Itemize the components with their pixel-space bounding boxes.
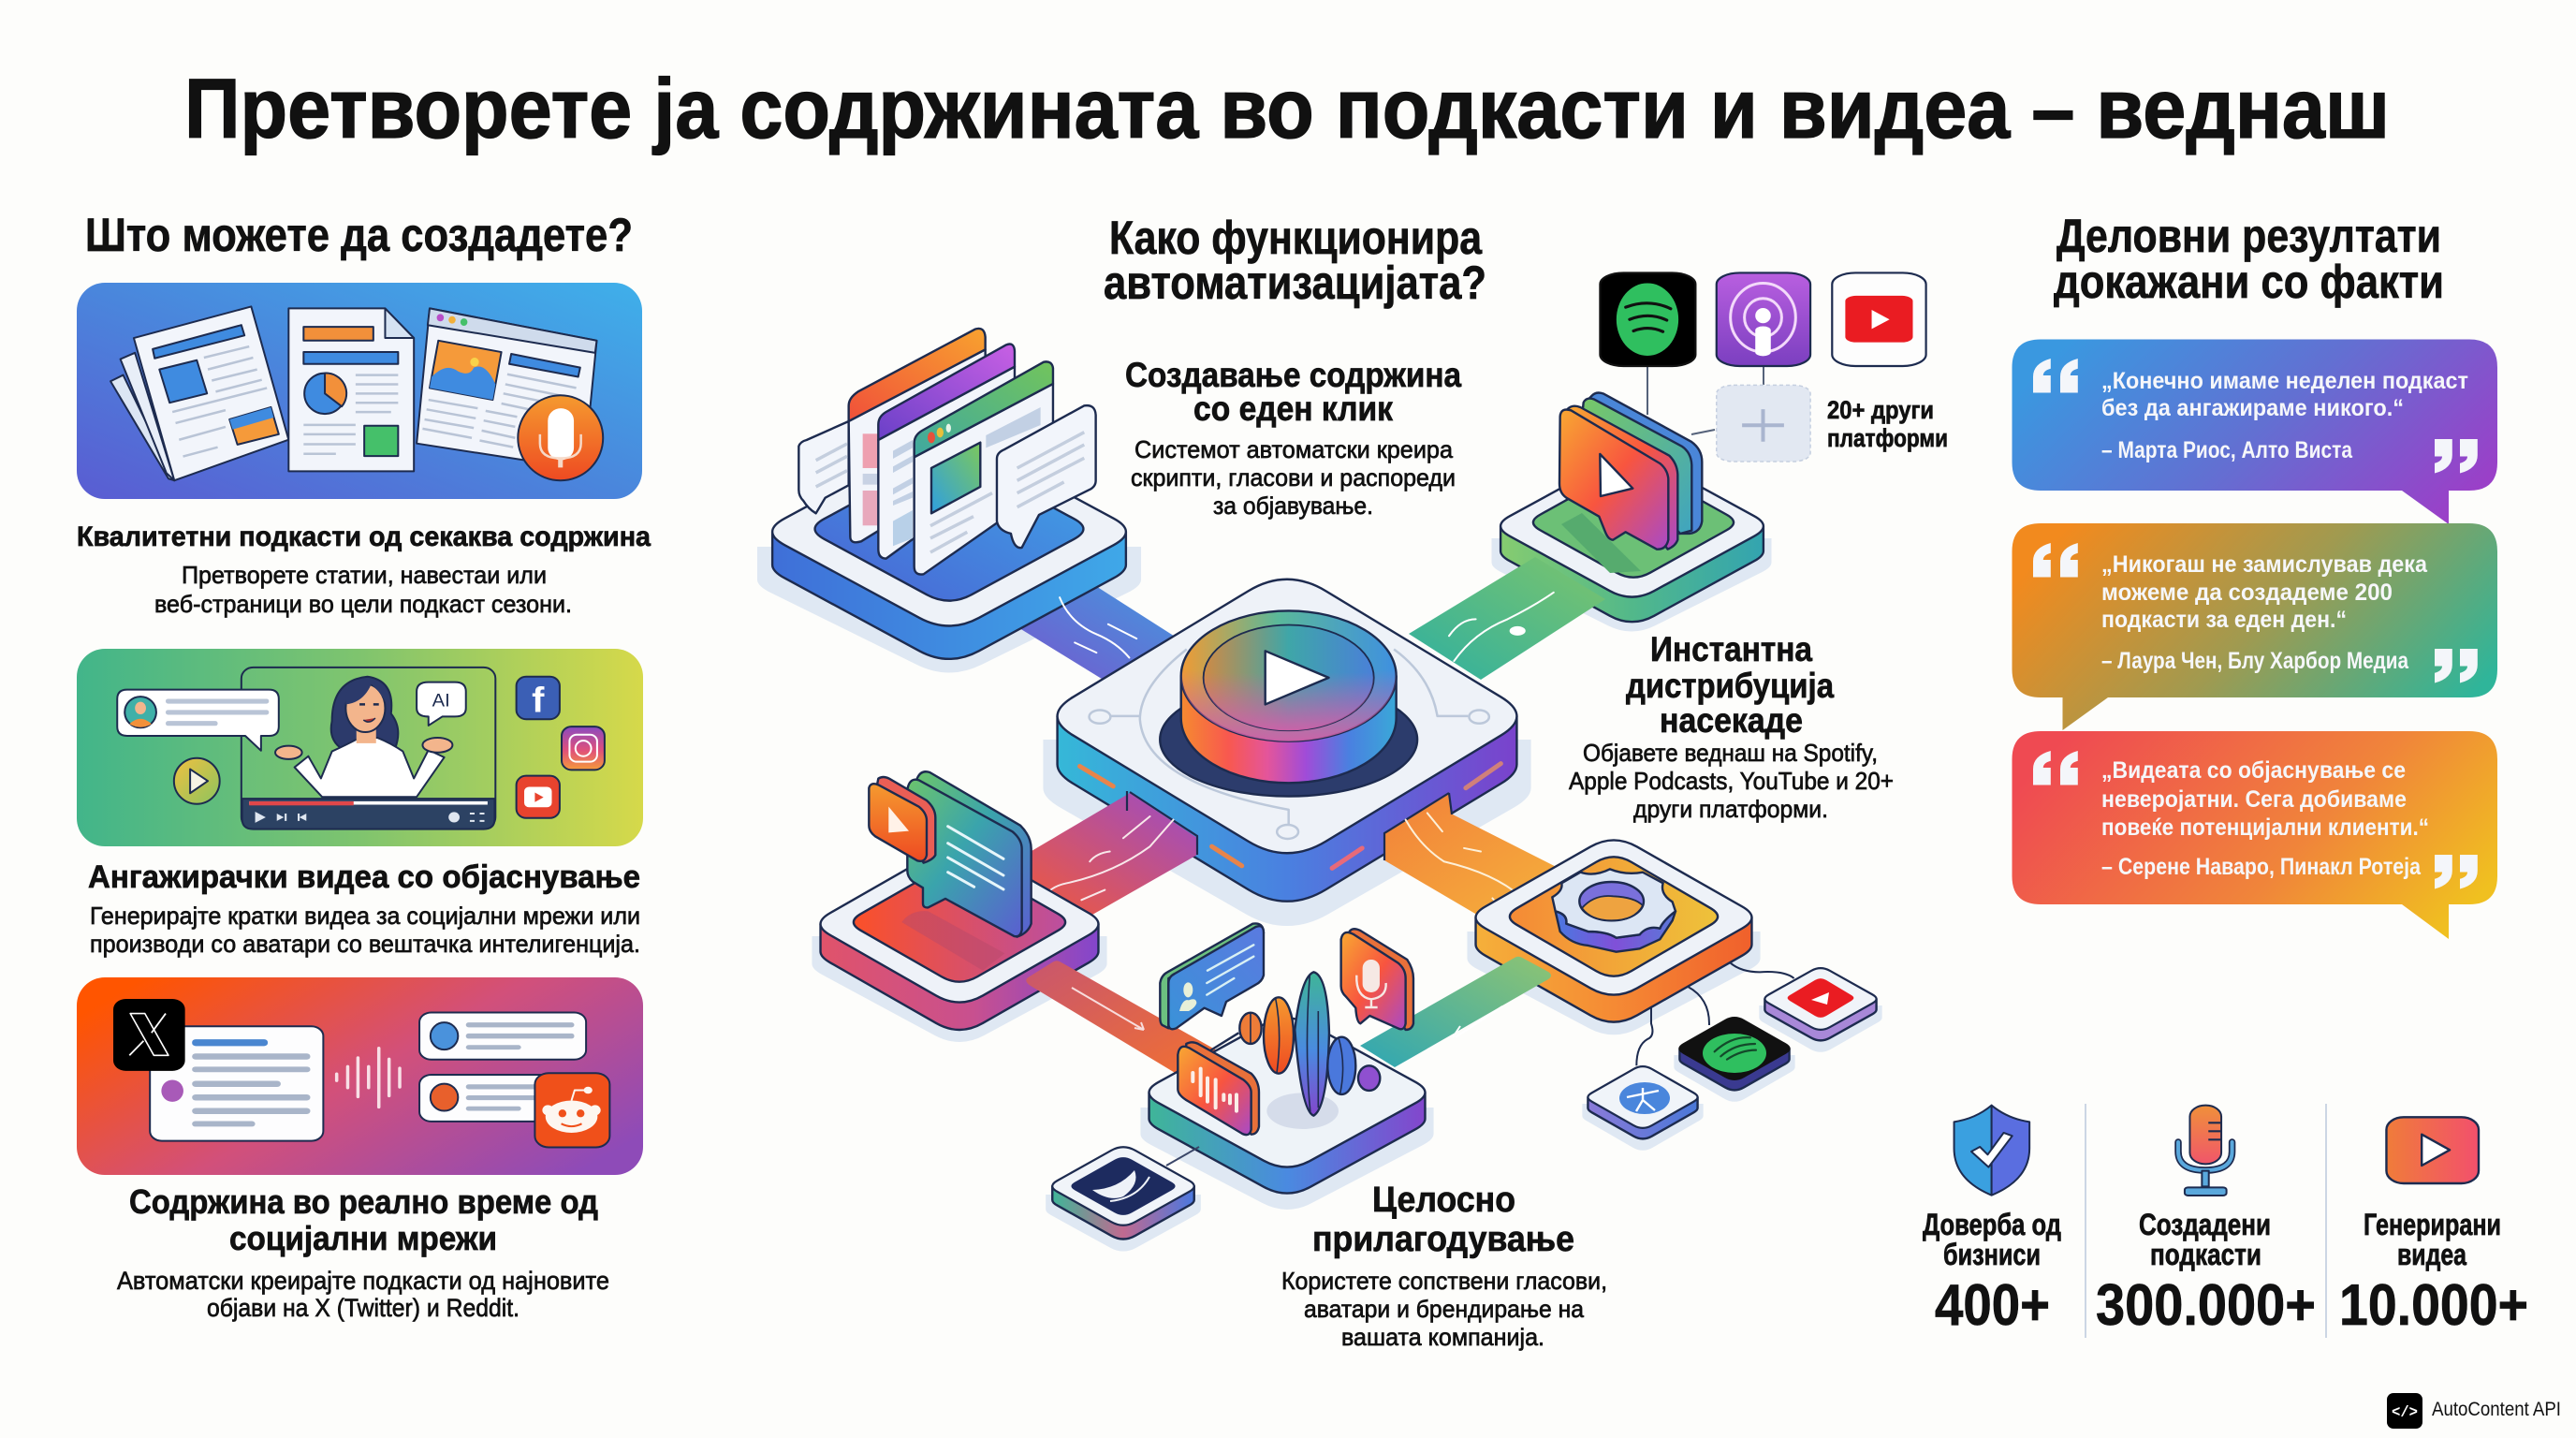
icon: more platforms: [1717, 385, 1810, 462]
text block: quality podcasts: веб-страници во цели подкаст сезони.: [154, 590, 572, 618]
text block: one-click content creation: Системот автоматски креира: [1134, 435, 1454, 463]
text block: quality podcasts: Квалитетни подкасти од секаква содржина: [77, 521, 651, 552]
panel: podcast card illustration: [77, 283, 642, 499]
callout: testimonial one: „Конечно имаме неделен подкаст: [2101, 368, 2468, 394]
heading: how automation works: автоматизацијата?: [1104, 257, 1486, 309]
text block: instant distribution: други платформи.: [1633, 795, 1828, 823]
title: Претворете ја содржината во подкасти и видеа – веднаш: [184, 63, 2390, 156]
icon: video and script bubbles: [869, 771, 1032, 971]
icon: brand feather tile on small platform: [1052, 1147, 1194, 1225]
text block: social content: социјални мрежи: [229, 1219, 497, 1257]
text block: social content: [117, 1182, 609, 1322]
callout: testimonial two: можеме да создадеме 200: [2101, 580, 2393, 606]
brand badge: AutoContent API: [2432, 1399, 2561, 1420]
text block: instant distribution: [1569, 630, 1894, 823]
heading: business results: Деловни резултати: [2056, 210, 2441, 262]
divider and stat: created podcasts: [2096, 1104, 2327, 1338]
stat: generated videos: видеа: [2397, 1238, 2466, 1271]
heading: how automation works: Како функционира: [1109, 212, 1483, 264]
text block: full customization: аватари и брендирање на: [1304, 1295, 1585, 1323]
icon: blue person tile on small platform: [1588, 1066, 1698, 1128]
divider and stat: created podcasts: подкасти: [2150, 1238, 2261, 1271]
connector lines: small tiles: [1134, 962, 1794, 1166]
heading: business results: [2054, 210, 2444, 308]
connector lines to platform icons: [1647, 365, 1764, 434]
divider and stat: trusted by businesses: 400+: [1935, 1273, 2050, 1338]
text block: instant distribution: Apple Podcasts, YouTube и 20+: [1569, 767, 1894, 795]
callout: testimonial three: повеќе потенцијални клиенти.“: [2101, 814, 2429, 841]
callout: testimonial three: [2012, 731, 2497, 939]
icon: video player with presenter and social icons: AI: [432, 691, 450, 711]
icon: audio waves and bubbles: [1160, 923, 1413, 1135]
brand badge: [2387, 1393, 2561, 1429]
text block: social content: Автоматски креирајте подкасти од најновите: [117, 1267, 609, 1295]
text block: one-click content creation: со еден клик: [1193, 389, 1393, 428]
text block: social content: објави на X (Twitter) и Reddit.: [207, 1294, 520, 1322]
callout: testimonial two: – Лаура Чен, Блу Харбор Медиа: [2101, 648, 2409, 674]
text block: social content: Содржина во реално време од: [129, 1182, 598, 1221]
platform bases: [772, 526, 1877, 1239]
platform drop shadows: [757, 538, 1882, 1252]
text block: one-click content creation: [1125, 356, 1461, 520]
icon: stacked web pages and speech bubbles: [798, 329, 1096, 575]
icon: video play: [2386, 1117, 2479, 1183]
icon: shield with check: [1954, 1106, 2029, 1196]
text block: instant distribution: Објавете веднаш на Spotify,: [1583, 739, 1878, 767]
panel: social content card illustration: [77, 977, 643, 1175]
callout: testimonial two: „Никогаш не замислував дека: [2101, 551, 2428, 578]
divider and stat: created podcasts: 300.000+: [2096, 1273, 2316, 1338]
icon: video player with presenter and social icons: f: [532, 681, 545, 720]
stat: generated videos: Генерирани: [2364, 1208, 2501, 1241]
divider and stat: trusted by businesses: Доверба од: [1923, 1208, 2061, 1241]
text block: instant distribution: дистрибуција: [1626, 667, 1834, 705]
icon: documents and microphone: [110, 306, 603, 480]
panel: explainer video card illustration: [77, 649, 643, 846]
text block: explainer videos: производи со аватари со вештачка интелигенција.: [90, 930, 640, 958]
icon: play button: [1160, 610, 1417, 797]
text block: full customization: Целосно: [1372, 1181, 1515, 1220]
panel: content creation platform: [772, 329, 1126, 625]
brand badge: </>: [2392, 1404, 2418, 1422]
icon: video player with presenter and social icons: [117, 668, 605, 829]
callout: testimonial one: без да ангажираме никого.“: [2101, 395, 2404, 421]
heading: how automation works: [1104, 212, 1486, 309]
panel: central play hub: [1058, 580, 1516, 868]
text block: 20+ other platforms: платформи: [1827, 424, 1948, 452]
icon: Spotify tile on small platform: [1679, 1018, 1790, 1079]
text block: full customization: вашата компанија.: [1341, 1323, 1544, 1351]
divider and stat: trusted by businesses: бизниси: [1943, 1238, 2041, 1271]
icon: layered video bubbles: [1559, 392, 1702, 550]
heading: what you can create: Што можете да создадете?: [85, 209, 633, 261]
stat: generated videos: [2339, 1208, 2528, 1338]
text block: one-click content creation: скрипти, гласови и распореди: [1131, 463, 1456, 492]
icon: microphone: [2178, 1106, 2232, 1196]
callout: testimonial one: – Марта Риос, Алто Виста: [2101, 437, 2353, 463]
text block: explainer videos: Ангажирачки видеа со објаснување: [88, 859, 640, 895]
text block: quality podcasts: [77, 521, 651, 618]
text block: explainer videos: [88, 859, 640, 958]
text block: instant distribution: Инстантна: [1650, 630, 1812, 668]
icon: Spotify: [1600, 272, 1695, 366]
divider and stat: created podcasts: Создадени: [2139, 1208, 2271, 1241]
panel: customization settings platform: [1476, 840, 1751, 995]
icon: YouTube: [1832, 272, 1926, 366]
icon: Apple Podcasts: [1717, 272, 1810, 366]
divider and stat: trusted by businesses: [1923, 1104, 2086, 1338]
text block: 20+ other platforms: [1827, 396, 1948, 452]
callout: testimonial three: – Серене Наваро, Пинакл Ротеја: [2101, 854, 2422, 880]
text block: explainer videos: Генерирајте кратки видеа за социјални мрежи или: [90, 902, 640, 930]
text block: full customization: Користете сопствени гласови,: [1281, 1267, 1607, 1295]
callout: testimonial three: „Видеата со објаснување се: [2101, 757, 2406, 784]
heading: business results: докажани со факти: [2054, 256, 2444, 308]
text block: full customization: [1281, 1181, 1607, 1351]
panel: script platform: [821, 771, 1098, 1003]
text block: one-click content creation: за објавување.: [1213, 492, 1373, 520]
panel: instant distribution platform: [1500, 392, 1764, 597]
stat: generated videos: 10.000+: [2339, 1273, 2528, 1338]
text block: instant distribution: насекаде: [1660, 701, 1803, 740]
connector: hub to platforms bands: [1006, 557, 1605, 1077]
panel: customization wave platform: [1149, 923, 1425, 1167]
callout: testimonial two: подкасти за еден ден.“: [2101, 607, 2347, 633]
text block: quality podcasts: Претворете статии, навестаи или: [182, 561, 547, 589]
icon: X and Reddit posts with sound wave: [113, 999, 609, 1147]
text block: 20+ other platforms: 20+ други: [1827, 396, 1934, 424]
callout: testimonial three: неверојатни. Сега добиваме: [2101, 786, 2407, 813]
callout: testimonial one: [2012, 339, 2497, 524]
icon: gear: [1552, 869, 1676, 952]
callout: testimonial two: [2012, 523, 2497, 730]
icon: YouTube tile on small platform: [1764, 968, 1877, 1030]
connector: content to hub band: [983, 562, 1179, 683]
text block: full customization: прилагодување: [1312, 1220, 1574, 1259]
text block: one-click content creation: Создавање содржина: [1125, 356, 1461, 394]
